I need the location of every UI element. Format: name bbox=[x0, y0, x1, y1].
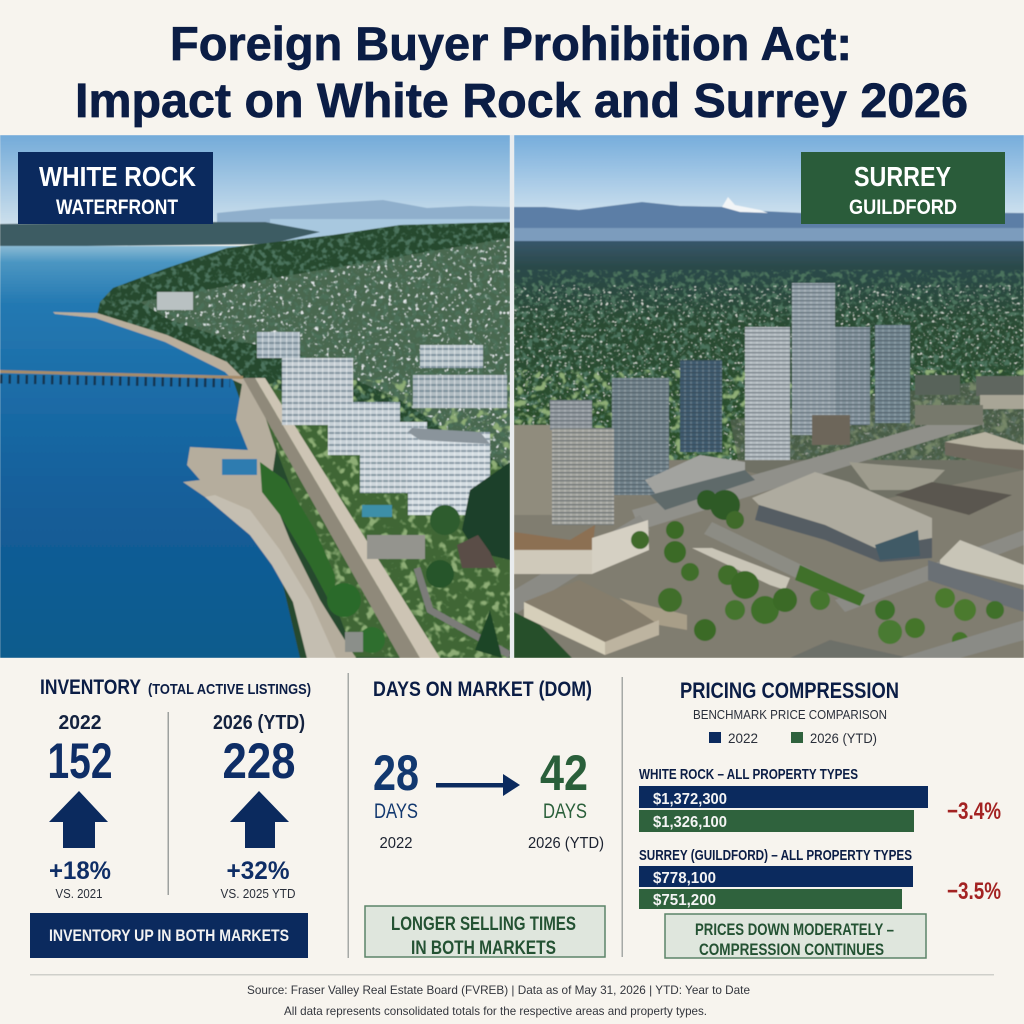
callout: longer selling times bbox=[365, 906, 605, 959]
2026 days value: DAYS bbox=[543, 800, 587, 823]
white rock change: −3.4% bbox=[947, 798, 1001, 825]
photo panel: Surrey Guildford bbox=[514, 135, 1024, 658]
photo divider bbox=[510, 135, 514, 658]
panel: days on market bbox=[365, 678, 605, 959]
inventory heading bbox=[40, 676, 311, 699]
pricing heading bbox=[680, 678, 899, 722]
inventory 2026 value: 228 bbox=[222, 733, 296, 789]
source footer: Source: Fraser Valley Real Estate Board (FVREB) | Data as of May 31, 2026 | YTD: Year to Date bbox=[247, 983, 750, 997]
legend: 2026 (YTD) bbox=[810, 730, 877, 746]
inventory 2026 value bbox=[213, 712, 305, 789]
inventory 2022 value: 152 bbox=[48, 733, 112, 789]
label: Surrey Guildford: SURREY bbox=[854, 161, 951, 192]
label: White Rock Waterfront bbox=[18, 152, 213, 224]
title bbox=[75, 17, 968, 128]
label: Surrey Guildford bbox=[801, 152, 1005, 224]
inventory 2022 change: +18% bbox=[49, 857, 111, 885]
surrey change: −3.5% bbox=[947, 878, 1001, 905]
pricing heading: BENCHMARK PRICE COMPARISON bbox=[693, 707, 887, 722]
inventory 2022 change bbox=[49, 857, 111, 901]
inventory 2026 change: +32% bbox=[226, 857, 290, 885]
callout: longer selling times: IN BOTH MARKETS bbox=[411, 938, 556, 959]
source footer: All data represents consolidated totals for the respective areas and property types. bbox=[284, 1004, 707, 1018]
white rock bars: WHITE ROCK – ALL PROPERTY TYPES bbox=[639, 766, 858, 783]
inventory heading: INVENTORY bbox=[40, 676, 141, 699]
towers group bbox=[550, 283, 910, 525]
inventory 2026 value: 2026 (YTD) bbox=[213, 712, 305, 734]
inventory 2026 change: VS. 2025 YTD bbox=[220, 886, 296, 901]
pricing heading: PRICING COMPRESSION bbox=[680, 678, 899, 703]
2022 days value: DAYS bbox=[374, 800, 418, 823]
label: Surrey Guildford: GUILDFORD bbox=[849, 196, 957, 219]
callout: longer selling times: LONGER SELLING TIMES bbox=[391, 914, 576, 935]
white rock bars: $1,326,100 bbox=[653, 814, 727, 831]
label: White Rock Waterfront: WHITE ROCK bbox=[39, 161, 196, 192]
title: Foreign Buyer Prohibition Act: bbox=[170, 17, 852, 70]
2022 days value bbox=[373, 745, 419, 852]
callout: inventory up bbox=[30, 913, 308, 958]
callout: prices down: PRICES DOWN MODERATELY – bbox=[695, 920, 894, 939]
legend: 2022 bbox=[728, 730, 758, 746]
inventory heading: (TOTAL ACTIVE LISTINGS) bbox=[148, 681, 311, 698]
inventory 2022 change: VS. 2021 bbox=[56, 886, 102, 901]
panel: inventory bbox=[30, 676, 311, 958]
callout: inventory up: INVENTORY UP IN BOTH MARKETS bbox=[49, 926, 289, 945]
surrey bars bbox=[639, 847, 913, 909]
photo panel: White Rock waterfront bbox=[0, 135, 510, 658]
source footer bbox=[247, 983, 750, 1018]
2022 days value: 2022 bbox=[380, 835, 413, 852]
callout: prices down bbox=[665, 914, 926, 959]
surrey bars: SURREY (GUILDFORD) – ALL PROPERTY TYPES bbox=[639, 847, 912, 864]
label: White Rock Waterfront: WATERFRONT bbox=[56, 196, 178, 219]
title: Impact on White Rock and Surrey 2026 bbox=[75, 75, 968, 128]
surrey bars: $751,200 bbox=[653, 892, 716, 909]
arrow: 2022 to 2026 bbox=[436, 774, 520, 796]
inventory 2022 value: 2022 bbox=[58, 712, 102, 734]
inventory 2026 change bbox=[220, 857, 296, 901]
icon: up arrow 2022 bbox=[49, 791, 108, 848]
white rock bars: $1,372,300 bbox=[653, 791, 727, 808]
2022 days value: 28 bbox=[373, 745, 419, 801]
white rock bars bbox=[639, 766, 928, 832]
2026 days value bbox=[528, 745, 604, 852]
days on market heading: DAYS ON MARKET (DOM) bbox=[373, 678, 592, 701]
panel: pricing compression bbox=[639, 678, 1001, 959]
surrey bars: $778,100 bbox=[653, 870, 716, 887]
legend bbox=[709, 730, 877, 746]
callout: prices down: COMPRESSION CONTINUES bbox=[699, 940, 884, 959]
2026 days value: 2026 (YTD) bbox=[528, 835, 604, 852]
icon: up arrow 2026 bbox=[230, 791, 289, 848]
2026 days value: 42 bbox=[540, 745, 588, 801]
inventory 2022 value bbox=[48, 712, 112, 789]
